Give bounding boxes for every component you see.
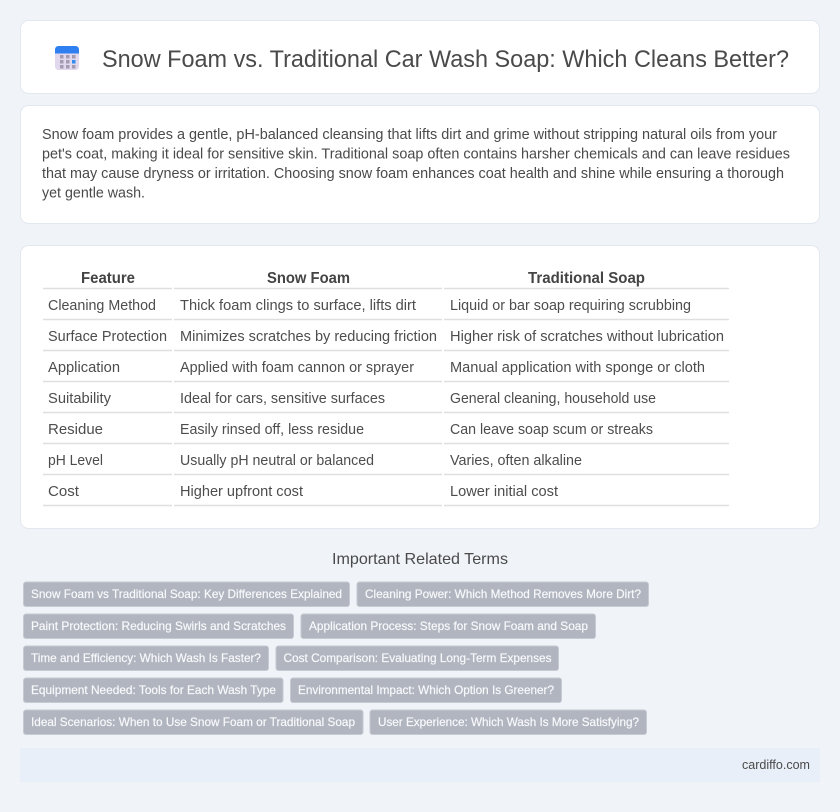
tag: Cleaning Power: Which Method Removes More Dirt? [365,587,641,601]
table row: cost: Higher upfront cost [180,484,303,500]
tag [276,646,558,670]
table row: cleaning method: Liquid or bar soap requiring scrubbing [450,298,691,314]
tag: Ideal Scenarios: When to Use Snow Foam or Traditional Soap [31,715,355,729]
tag: User Experience: Which Wash Is More Satisfying? [378,715,639,729]
table row: residue: Can leave soap scum or streaks [450,422,653,438]
text block: introduction: Snow foam provides a gentle, pH-balanced cleansing that lifts dirt and grime without stripping natural oils from your [42,127,777,143]
tag [370,710,646,734]
table row: suitability: Suitability [48,391,112,407]
table row: residue: Residue [48,422,103,438]
table row: suitability: General cleaning, household use [450,391,656,407]
table row: pH level: Usually pH neutral or balanced [180,453,374,469]
panel: comparison table [20,246,820,528]
tag [24,646,268,670]
title: Snow Foam vs. Traditional Car Wash Soap: Which Cleans Better? [102,46,789,73]
text block: introduction: pet's coat, making it ideal for sensitive skin. Traditional soap often contains harsher chemicals and can leave residues [42,146,790,162]
table row: pH level [48,453,582,469]
table row: residue: Easily rinsed off, less residue [180,422,364,438]
tag [24,582,350,606]
table row: pH level: Varies, often alkaline [450,453,582,469]
table row: application [48,360,705,376]
tag [301,614,596,638]
table row: cost: Lower initial cost [450,484,558,500]
table header [81,270,645,287]
tag [357,582,648,606]
table row: surface protection: Surface Protection [48,329,167,345]
table row: application: Applied with foam cannon or sprayer [180,360,414,376]
tag group: related terms [24,582,648,734]
table row: pH level: pH Level [48,453,103,469]
text block: introduction: that may cause dryness or irritation. Choosing snow foam enhances coat health and shine while ensuring a thorough [42,166,784,182]
footer [20,748,820,782]
tag: Environmental Impact: Which Option Is Greener? [298,683,554,697]
table row: cost: Cost [48,484,79,500]
icon: calendar [55,46,79,70]
tag: Equipment Needed: Tools for Each Wash Type [31,683,276,697]
table row: suitability: Ideal for cars, sensitive surfaces [180,391,385,407]
table header: Snow Foam [267,270,350,287]
heading: related terms: Important Related Terms [332,551,508,568]
table header: Traditional Soap [528,270,645,287]
tag: Paint Protection: Reducing Swirls and Scratches [31,619,286,633]
tag [24,678,283,702]
tag: Time and Efficiency: Which Wash Is Faster? [31,651,261,665]
panel: introduction [20,106,820,224]
tag: Application Process: Steps for Snow Foam and Soap [309,619,588,633]
footer: cardiffo.com [742,758,810,772]
tag: Cost Comparison: Evaluating Long-Term Expenses [284,651,552,665]
tag [24,614,294,638]
table row: surface protection: Higher risk of scratches without lubrication [450,329,724,345]
table header: Feature [81,270,135,287]
table row: cost [48,484,558,500]
table row: application: Manual application with sponge or cloth [450,360,705,376]
tag [24,710,363,734]
table row: suitability [48,391,656,407]
text block: introduction: yet gentle wash. [42,186,145,202]
tag: Snow Foam vs Traditional Soap: Key Differences Explained [31,587,342,601]
table row: cleaning method: Thick foam clings to surface, lifts dirt [180,298,416,314]
table row: cleaning method: Cleaning Method [48,298,156,314]
panel: header [20,20,820,94]
tag [290,678,562,702]
table row: cleaning method [48,298,691,314]
table row: application: Application [48,360,120,376]
text block: introduction [42,127,790,202]
table row: surface protection: Minimizes scratches by reducing friction [180,329,437,345]
table row: surface protection [48,329,724,345]
table row: residue [48,422,653,438]
